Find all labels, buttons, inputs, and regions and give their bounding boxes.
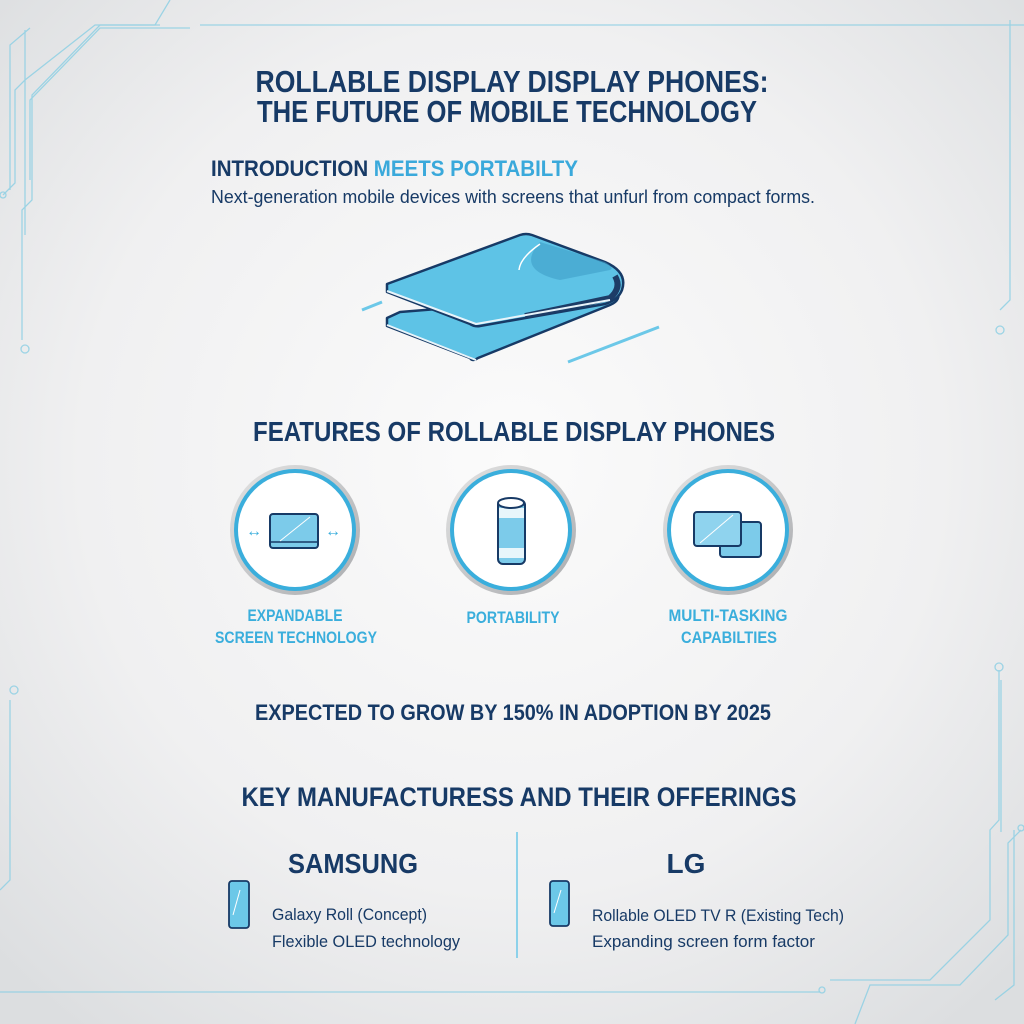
title: THE FUTURE OF MOBILE TECHNOLOGY (257, 94, 757, 129)
intro heading: INTRODUCTION MEETS PORTABILTY (211, 156, 578, 181)
feature: portability (446, 465, 576, 627)
lg column (550, 848, 844, 951)
samsung column: SAMSUNG (288, 848, 418, 879)
feature: multi-tasking (663, 465, 793, 647)
title: ROLLABLE DISPLAY DISPLAY PHONES: (256, 64, 768, 99)
lg column: Expanding screen form factor (592, 932, 815, 951)
feature: expandable screen: SCREEN TECHNOLOGY (215, 628, 378, 647)
illustration: rollable display (362, 234, 659, 362)
intro text: Next-generation mobile devices with screens that unfurl from compact forms. (211, 187, 815, 207)
samsung column: Galaxy Roll (Concept) (272, 905, 427, 924)
feature: portability: PORTABILITY (466, 608, 560, 627)
lg column: Rollable OLED TV R (Existing Tech) (592, 906, 844, 925)
feature: expandable screen (215, 465, 378, 647)
growth stat: EXPECTED TO GROW BY 150% IN ADOPTION BY 2025 (255, 700, 771, 725)
feature: multi-tasking: CAPABILTIES (681, 628, 777, 647)
lg column: LG (667, 848, 705, 879)
feature: expandable screen: ↔ (246, 523, 262, 540)
samsung column (229, 848, 460, 951)
samsung column: Flexible OLED technology (272, 932, 460, 951)
manufacturers heading: KEY MANUFACTURESS AND THEIR OFFERINGS (242, 782, 796, 812)
feature: expandable screen: ↔ (325, 523, 341, 540)
feature: multi-tasking: MULTI-TASKING (668, 606, 788, 625)
feature: expandable screen: EXPANDABLE (248, 606, 342, 625)
title (256, 64, 768, 129)
features heading: FEATURES OF ROLLABLE DISPLAY PHONES (253, 416, 775, 447)
